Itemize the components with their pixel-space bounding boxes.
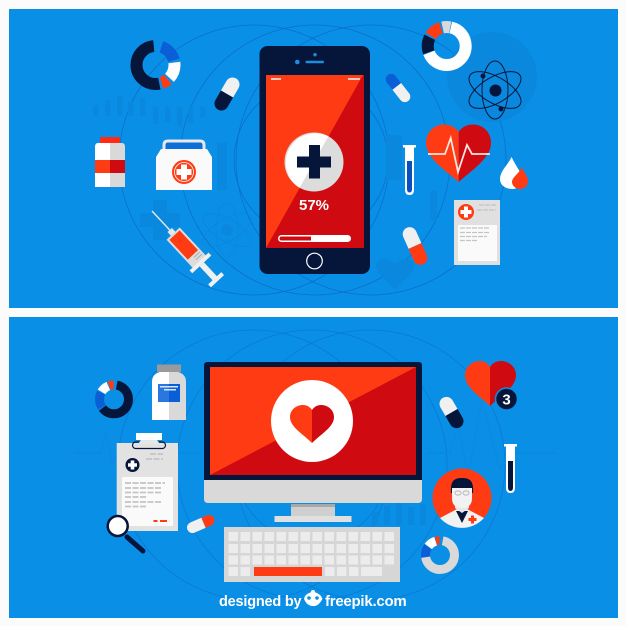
icon: syringe bbox=[142, 202, 227, 290]
test tube: navy bbox=[504, 444, 517, 493]
heart badge bbox=[271, 380, 353, 462]
pill: white and red bbox=[400, 225, 430, 267]
count badge: 3 bbox=[502, 392, 511, 408]
monitor screen bbox=[210, 367, 416, 475]
phone screen bbox=[266, 75, 364, 248]
icon: heart with pulse bbox=[426, 124, 491, 182]
footer credit: designed by bbox=[219, 594, 302, 610]
pill: white and navy bbox=[212, 75, 242, 113]
icon: freepik logo bbox=[304, 590, 322, 606]
icon: first aid kit bbox=[156, 141, 212, 190]
donut chart: top left bbox=[136, 46, 174, 84]
donut chart: top right bbox=[428, 27, 466, 65]
phone bbox=[260, 46, 370, 274]
bottle: blue label bbox=[152, 364, 186, 420]
home button bbox=[307, 253, 322, 269]
monitor stand bbox=[274, 504, 352, 522]
pill: white and red, horizontal bbox=[185, 513, 216, 535]
plus badge bbox=[284, 132, 344, 192]
faint background shapes: bottom panel bbox=[75, 400, 556, 475]
keyboard bbox=[224, 527, 400, 582]
progress bar bbox=[278, 235, 351, 242]
footer credit: freepik.com bbox=[325, 593, 406, 610]
pill: blue and white bbox=[384, 72, 412, 104]
donut chart: bottom right bbox=[426, 540, 454, 570]
test tube: blue bbox=[403, 145, 416, 195]
clipboard bbox=[117, 433, 178, 531]
panel: desktop health background bbox=[9, 317, 618, 618]
panel: phone health background bbox=[9, 9, 618, 308]
icon: atom bbox=[463, 61, 527, 119]
monitor bbox=[204, 362, 422, 522]
spacebar bbox=[254, 567, 322, 576]
clip bbox=[132, 433, 166, 448]
monitor chin bbox=[204, 480, 422, 503]
faint background shapes: top panel bbox=[93, 32, 537, 290]
footer credit bbox=[219, 590, 406, 610]
pill: white and navy, bottom bbox=[437, 394, 466, 431]
icon: doctor avatar bbox=[432, 468, 492, 528]
phone speaker and camera bbox=[295, 53, 324, 64]
bottle: red label bbox=[95, 137, 125, 187]
donut chart: bottom left bbox=[100, 385, 128, 414]
document: top right bbox=[454, 200, 500, 265]
icon: drops bbox=[500, 157, 528, 189]
heart with badge bbox=[465, 361, 518, 410]
icon: magnifier bbox=[108, 516, 143, 551]
percentage: 57% bbox=[299, 197, 329, 214]
